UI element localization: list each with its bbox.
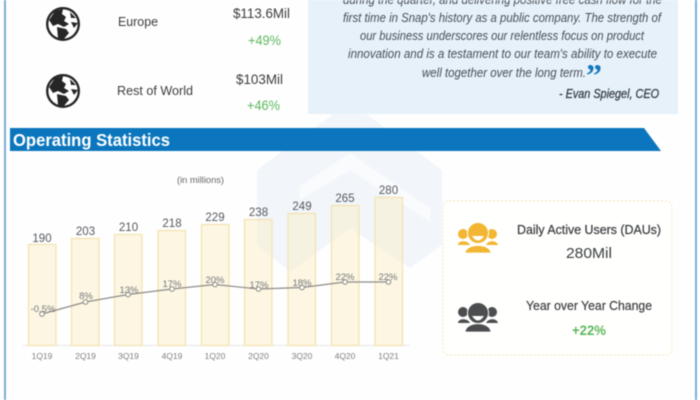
panel: CEO quote — [308, 0, 678, 114]
quarter axis labels: 3Q20 — [292, 351, 313, 361]
panel: regional revenue — [47, 6, 290, 113]
line: year over year growth — [42, 282, 388, 314]
bar value labels: 203 — [76, 226, 95, 238]
bar value labels: 238 — [249, 207, 268, 219]
icon: globe Rest of World — [47, 75, 79, 107]
quarter axis labels: 1Q19 — [32, 351, 53, 361]
quote attribution: - Evan Spiegel, CEO — [559, 86, 659, 101]
quarter axis labels: 3Q19 — [118, 351, 139, 361]
quote text: our business underscores our relentless focus on product — [360, 28, 645, 43]
quarter axis labels: 1Q21 — [378, 351, 399, 361]
icon: globe Europe — [47, 8, 79, 40]
bars — [28, 198, 402, 346]
quarter axis labels: 2Q19 — [75, 351, 96, 361]
bar value labels: 280 — [379, 185, 398, 197]
chart note: in millions: (in millions) — [177, 175, 224, 185]
line markers — [40, 280, 391, 316]
change: Rest of World growth: +46% — [247, 98, 280, 113]
quote text: first time in Snap's history as a public company. The strength of — [343, 10, 662, 25]
quarter axis labels: 1Q20 — [205, 351, 226, 361]
growth percentage labels — [31, 272, 398, 315]
growth percentage labels: 22% — [378, 272, 398, 283]
label: Rest of World: Rest of World — [117, 83, 193, 98]
icon: yellow users — [458, 222, 498, 253]
icon: gray users — [458, 302, 498, 332]
bar chart: daily active users — [23, 185, 410, 361]
quarter axis labels: 4Q20 — [335, 351, 356, 361]
panel: DAU summary — [443, 201, 672, 355]
label: Europe: Europe — [118, 14, 158, 29]
quarter axis labels: 2Q20 — [248, 351, 269, 361]
growth percentage labels: 18% — [292, 278, 312, 289]
quote text — [343, 0, 662, 80]
quote text: innovation and is a testament to our team's ability to execute — [348, 46, 657, 61]
bar value labels: 229 — [205, 212, 225, 224]
quote text: well together over the long term. — [422, 65, 586, 80]
value: Rest of World revenue: $103Mil — [236, 72, 283, 87]
value: Europe revenue: $113.6Mil — [233, 6, 290, 21]
growth percentage labels: 22% — [335, 272, 355, 283]
growth percentage labels: 17% — [162, 279, 182, 290]
bar value labels — [32, 185, 398, 245]
heading: Operating Statistics: Operating Statistics — [13, 130, 170, 150]
growth percentage labels: 8% — [79, 291, 93, 302]
bar value labels: 190 — [32, 233, 52, 245]
label: Daily Active Users: Daily Active Users (DAUs) — [517, 222, 661, 237]
bar value labels: 210 — [119, 222, 138, 234]
bar value labels: 218 — [162, 218, 182, 230]
change: Europe growth: +49% — [248, 33, 281, 48]
icon: closing quotation mark: ” — [586, 57, 602, 93]
label: Year over Year Change: Year over Year Change — [526, 298, 652, 313]
growth percentage labels: 20% — [205, 275, 225, 286]
bar value labels: 265 — [335, 193, 355, 205]
growth percentage labels: 17% — [249, 280, 269, 291]
growth percentage labels: -0.5% — [31, 304, 56, 315]
growth percentage labels: 13% — [119, 285, 139, 296]
heading: Operating Statistics — [10, 128, 661, 151]
quarter axis labels — [32, 351, 399, 361]
quarter axis labels: 4Q19 — [162, 351, 183, 361]
value: +22%: +22% — [572, 323, 606, 338]
bar value labels: 249 — [292, 201, 312, 213]
value: 280Mil: 280Mil — [566, 245, 612, 262]
